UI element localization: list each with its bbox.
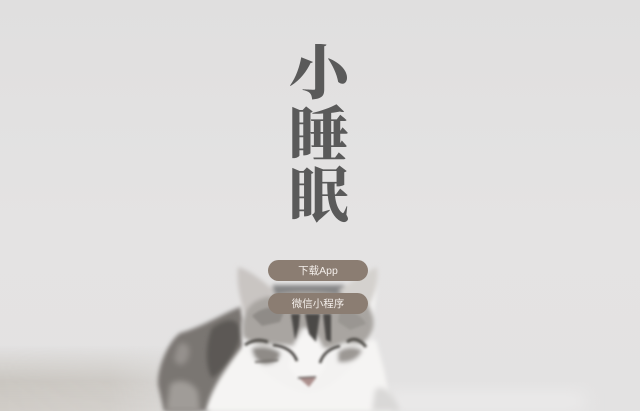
title: 眠 [289, 164, 349, 229]
cat face details [245, 339, 366, 387]
cat head [237, 267, 378, 392]
title: 睡 [289, 102, 349, 168]
button: mini program [268, 293, 368, 314]
cat photo background [0, 268, 570, 411]
button: download app: 下载App [298, 264, 338, 276]
button: mini program: 微信小程序 [292, 298, 344, 310]
cat body and tail [158, 306, 400, 411]
title [289, 44, 349, 229]
button: download app [268, 260, 368, 281]
cat forehead stripes [252, 307, 366, 342]
